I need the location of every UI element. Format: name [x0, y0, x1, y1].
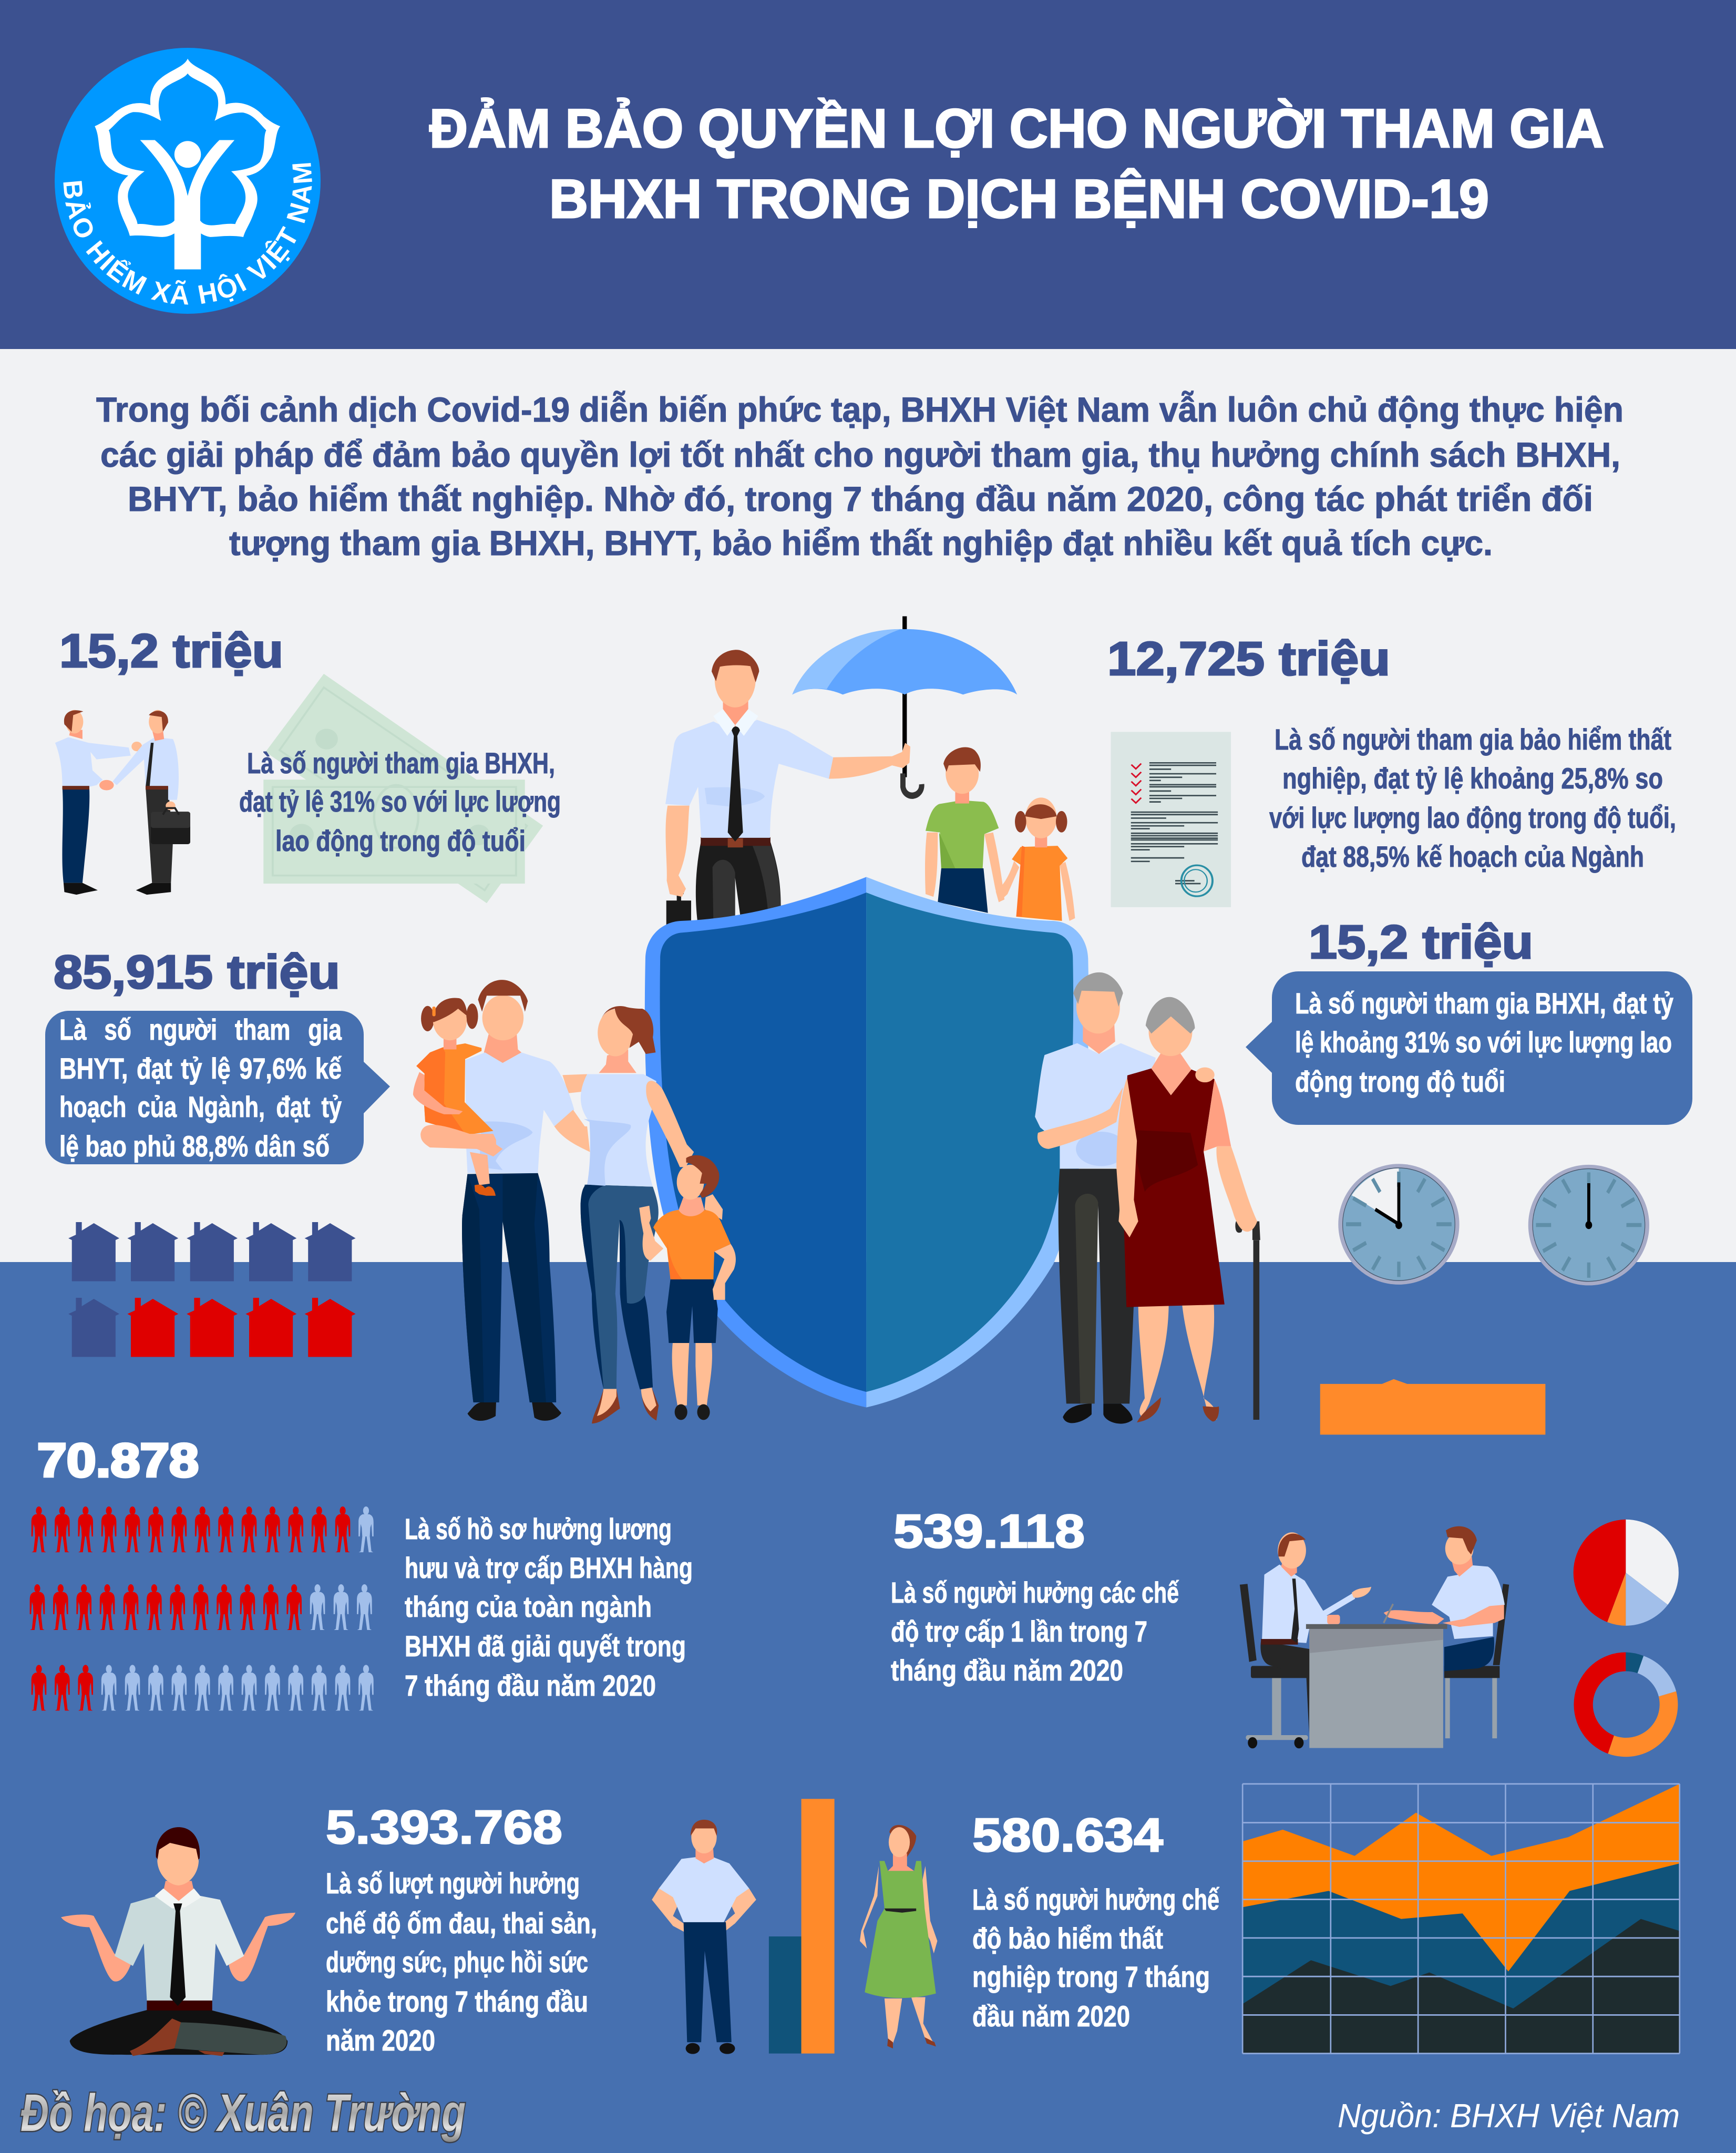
intro paragraph: [96, 390, 1624, 562]
icon: banknotes: [263, 674, 543, 903]
text: unemployment insurance participants: đạt 88,5% kế hoạch của Ngành: [1301, 840, 1644, 873]
text: sickness and maternity: dưỡng sức, phục hồi sức: [326, 1945, 588, 1978]
text: sickness and maternity: Là số lượt người hưởng: [326, 1867, 580, 1900]
credit: graphics: Đồ họa: © Xuân Trường: [20, 2084, 466, 2142]
text: BHXH participants: [239, 746, 561, 857]
header band: [0, 0, 1736, 349]
lower blue background: [0, 1262, 1736, 2153]
callout: BHYT: lệ bao phủ 88,8% dân số: [59, 1130, 330, 1163]
callout: BHYT: [45, 1011, 390, 1164]
text: unemployment benefits: Là số người hưởng chế: [972, 1883, 1220, 1916]
text: unemployment insurance participants: [1269, 723, 1676, 873]
icon: businessmen handshake: [55, 710, 190, 895]
text: pension records: Là số hồ sơ hưởng lương: [405, 1512, 672, 1545]
text: unemployment benefits: đầu năm 2020: [972, 2000, 1130, 2033]
man with umbrella: [665, 616, 1017, 927]
icon: clocks: [1338, 1164, 1649, 1285]
orange block: [1320, 1379, 1545, 1434]
pictogram: people rows: [30, 1506, 374, 1710]
stat heading: 85,915 triệu: 85,915 triệu: [54, 946, 340, 999]
icon: document with checklist: [1111, 732, 1231, 907]
callout: BHYT: hoạch của Ngành, đạt tỷ: [59, 1090, 342, 1123]
stat heading: 15,2 triệu: 15,2 triệu: [59, 625, 283, 678]
intro paragraph: Trong bối cảnh dịch Covid-19 diễn biến phức tạp, BHXH Việt Nam vẫn luôn chủ động thực hiện: [96, 390, 1624, 429]
logo: Bảo hiểm xã hội Việt Nam: [55, 48, 321, 314]
source: Nguồn: BHXH Việt Nam: [1338, 2097, 1680, 2135]
text: sickness and maternity: năm 2020: [326, 2024, 435, 2057]
stat: 580.634: 580.634: [972, 1809, 1163, 1862]
text: unemployment benefits: độ bảo hiểm thất: [972, 1922, 1163, 1955]
boy and girl holding hands: [925, 747, 1075, 921]
title: [429, 98, 1604, 230]
text: sickness and maternity: khỏe trong 7 tháng đầu: [326, 1985, 588, 2018]
area chart: [1242, 1784, 1680, 2054]
text: sickness and maternity: chế độ ốm đau, thai sản,: [326, 1906, 597, 1940]
text: pension records: tháng của toàn ngành: [405, 1590, 652, 1623]
icon: man, woman and bars: [652, 1799, 937, 2054]
text: one-time allowance: [891, 1576, 1179, 1687]
stat: 539.118: 539.118: [893, 1505, 1085, 1558]
text: pension records: [405, 1512, 693, 1702]
callout: BHYT: Là số người tham gia: [59, 1013, 342, 1046]
text: BHXH participants: Là số người tham gia BHXH,: [247, 746, 555, 780]
intro paragraph: các giải pháp để đảm bảo quyền lợi tốt nhất cho người tham gia, thụ hưởng chính sách BHXH,: [100, 435, 1620, 474]
elderly couple with cane: [1035, 972, 1260, 1424]
text: pension records: 7 tháng đầu năm 2020: [405, 1669, 656, 1702]
text: BHXH participants: lao động trong độ tuổi: [275, 824, 526, 857]
title: ĐẢM BẢO QUYỀN LỢI CHO NGƯỜI THAM GIA: [429, 98, 1604, 159]
text: one-time allowance: độ trợ cấp 1 lần trong 7: [891, 1615, 1147, 1648]
logo: Bảo hiểm xã hội Việt Nam: BẢO HIỂM XÃ HỘI VIỆT NAM: [63, 163, 312, 305]
callout: BHXH participants: động trong độ tuổi: [1295, 1065, 1505, 1098]
text: unemployment benefits: nghiệp trong 7 tháng: [972, 1960, 1210, 1993]
shield: [645, 877, 1088, 1408]
stat: 70.878: 70.878: [37, 1434, 199, 1487]
stat: 5.393.768: 5.393.768: [326, 1801, 562, 1854]
title: BHXH TRONG DỊCH BỆNH COVID-19: [549, 169, 1489, 230]
donut chart: [1574, 1652, 1678, 1757]
text: sickness and maternity: [326, 1867, 597, 2057]
intro paragraph: tượng tham gia BHXH, BHYT, bảo hiểm thất nghiệp đạt nhiều kết quả tích cực.: [229, 524, 1493, 562]
callout: BHXH participants: [1246, 971, 1692, 1125]
text: unemployment benefits: [972, 1883, 1220, 2033]
family of four: [413, 980, 736, 1423]
icon: two men at desk: [1240, 1526, 1509, 1748]
icon: meditating man: [61, 1827, 295, 2056]
text: pension records: BHXH đã giải quyết trong: [405, 1629, 686, 1663]
text: BHXH participants: đạt tỷ lệ 31% so với lực lượng: [239, 785, 561, 818]
text: pension records: hưu và trợ cấp BHXH hàng: [405, 1551, 693, 1584]
stat heading: 15,2 triệu right: 15,2 triệu: [1309, 916, 1533, 969]
stat heading: 12,725 triệu: 12,725 triệu: [1107, 633, 1390, 685]
icon: houses: [68, 1222, 356, 1357]
callout: BHYT: BHYT, đạt tỷ lệ 97,6% kế: [59, 1052, 342, 1085]
text: one-time allowance: Là số người hưởng các chế: [891, 1576, 1179, 1609]
text: one-time allowance: tháng đầu năm 2020: [891, 1654, 1123, 1687]
intro paragraph: BHYT, bảo hiểm thất nghiệp. Nhờ đó, trong 7 tháng đầu năm 2020, công tác phát triển đối: [128, 479, 1593, 518]
pie chart: [1574, 1520, 1679, 1626]
